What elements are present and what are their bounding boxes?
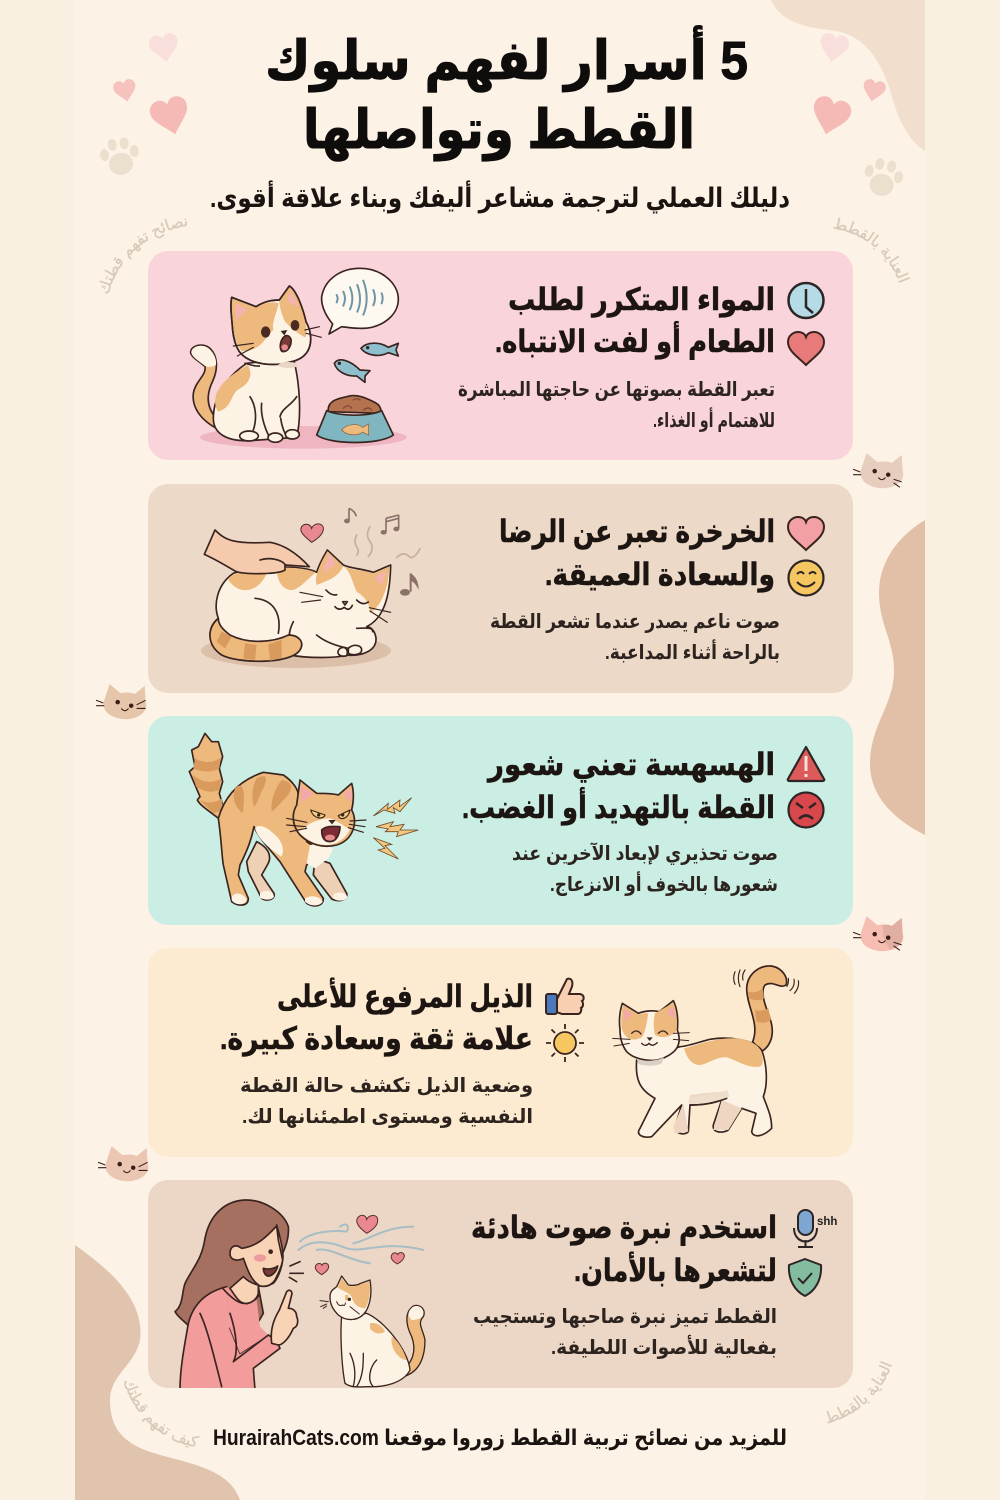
panel: hissing (148, 716, 853, 925)
body text: صوت تحذيري لإبعاد الآخرين عند (512, 842, 778, 866)
body text: بالراحة أثناء المداعبة. (605, 638, 780, 664)
watermark: top left arc: نصائح تفهم قطتك (100, 218, 187, 294)
icon: shield check (789, 1259, 821, 1296)
body text (458, 379, 775, 432)
illustration: happy cat with raised tail (613, 966, 799, 1137)
heading (495, 282, 775, 360)
body text: للاهتمام أو الغذاء. (653, 406, 775, 432)
footer: للمزيد من نصائح تربية القطط زوروا موقعنا HurairahCats.com (213, 1425, 787, 1451)
heading (471, 1210, 777, 1289)
icon: paw right (860, 155, 906, 200)
body text (473, 1306, 777, 1359)
illustration: hissing arched cat (189, 733, 418, 906)
body text (512, 842, 778, 896)
heading: القطة بالتهديد أو الغضب. (462, 787, 775, 826)
icon: sun (546, 1024, 584, 1062)
heading: الطعام أو لفت الانتباه. (495, 321, 775, 360)
panel: calm voice (148, 1180, 853, 1390)
watermark: bottom right arc: العناية بالقطط (826, 1361, 892, 1424)
icon: cat head left lower (98, 1146, 148, 1181)
icon: paw left (98, 135, 142, 178)
icon: red heart (788, 332, 824, 365)
title: القطط وتواصلها (303, 100, 695, 161)
heading: لتشعرها بالأمان. (574, 1251, 777, 1289)
icon: microphone with shh label: shh (817, 1216, 837, 1228)
icon: microphone with shh label (794, 1210, 837, 1247)
background blob: right (870, 520, 925, 835)
body text (240, 1075, 533, 1128)
body text: وضعية الذيل تكشف حالة القطة (240, 1075, 533, 1097)
heading (220, 977, 533, 1057)
watermark: top right arc: العناية بالقطط (834, 218, 910, 283)
background blob: top right (771, 0, 925, 151)
heading: الهسهسة تعني شعور (486, 747, 775, 783)
icon: cat head left upper (96, 684, 146, 719)
icon: clock (788, 283, 824, 318)
icon: cat head right top (853, 453, 903, 488)
heading: الخرخرة تعبر عن الرضا (499, 514, 775, 550)
illustration: woman speaking softly to cat (175, 1200, 425, 1390)
illustration: meowing cat, speech bubble, fish and bowl (191, 268, 407, 449)
heading: استخدم نبرة صوت هادئة (471, 1210, 777, 1246)
heading: الذيل المرفوع للأعلى (277, 977, 533, 1015)
decorative hearts left (112, 32, 193, 139)
icon: angry face (788, 792, 824, 828)
panel: purring (148, 484, 853, 693)
panel: raised tail (148, 948, 853, 1157)
decorative hearts right (808, 32, 887, 139)
heading: والسعادة العميقة. (545, 557, 775, 593)
heading: المواء المتكرر لطلب (508, 282, 775, 318)
subtitle: دليلك العملي لترجمة مشاعر أليفك وبناء علاقة أقوى. (210, 180, 790, 214)
heading: علامة ثقة وسعادة كبيرة. (220, 1021, 533, 1057)
heading (499, 514, 775, 593)
title (265, 25, 748, 161)
body text: صوت ناعم يصدر عندما تشعر القطة (490, 611, 780, 633)
panel: meowing (148, 251, 853, 460)
body text: بفعالية للأصوات اللطيفة. (551, 1334, 777, 1359)
title: 5 أسرار لفهم سلوك (265, 25, 748, 92)
heading (462, 747, 775, 826)
icon: cat head right bottom (853, 916, 903, 951)
icon: pink heart (788, 517, 824, 550)
background blob: bottom left (75, 1245, 240, 1500)
illustration: petted purring cat with notes (201, 508, 420, 668)
body text (490, 611, 780, 664)
body text: النفسية ومستوى اطمئنانها لك. (242, 1106, 533, 1128)
body text: القطط تميز نبرة صاحبها وتستجيب (473, 1306, 777, 1328)
watermark: bottom left arc: كيف تفهم قطتك (124, 1380, 200, 1448)
body text: تعبر القطة بصوتها عن حاجتها المباشرة (458, 379, 775, 401)
body text: شعورها بالخوف أو الانزعاج. (550, 870, 778, 896)
icon: thumbs up (546, 979, 584, 1014)
icon: smiling face (788, 560, 824, 596)
icon: warning triangle (788, 747, 824, 781)
